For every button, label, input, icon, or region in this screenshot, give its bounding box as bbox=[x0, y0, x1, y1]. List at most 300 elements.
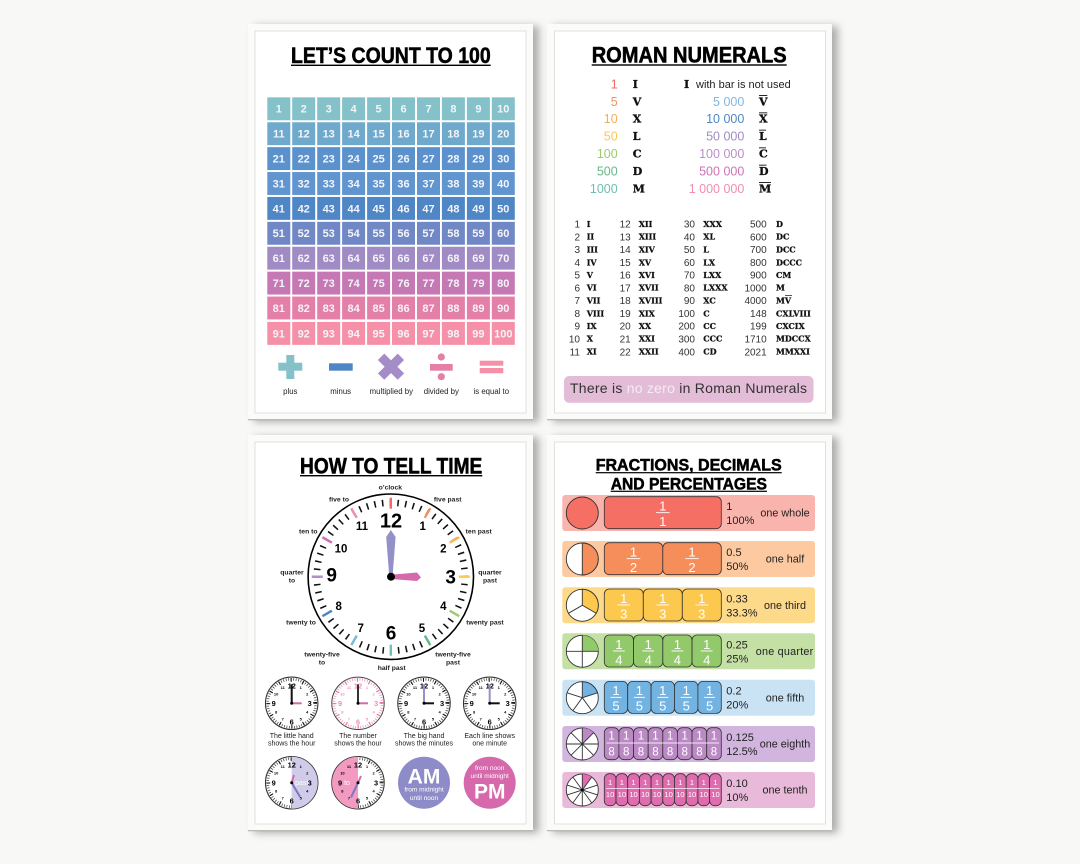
panel: roman numerals poster: V bbox=[758, 95, 768, 108]
big clock labels: quarter bbox=[478, 570, 502, 576]
table: number conversions: 20 bbox=[620, 322, 631, 333]
small clock: the number: 1 bbox=[366, 685, 369, 690]
row: one half bbox=[562, 541, 815, 577]
row: one tenth: 10 bbox=[688, 790, 696, 799]
number grid 1 to 100: 75 bbox=[372, 278, 385, 290]
operator labels: plus bbox=[283, 387, 298, 396]
number grid 1 to 100: 54 bbox=[347, 228, 361, 240]
clock numbers: 10 bbox=[335, 544, 347, 556]
clock numbers: 5 bbox=[419, 623, 426, 635]
small clock: each line: 1 bbox=[498, 685, 501, 690]
number grid 1 to 100: 90 bbox=[497, 303, 509, 315]
row: one tenth: 10 bbox=[629, 790, 638, 799]
number grid 1 to 100: 49 bbox=[472, 203, 485, 215]
small clock: the number bbox=[332, 677, 384, 730]
small clock: the little hand: 10 bbox=[274, 691, 279, 696]
AM badge: until noon bbox=[410, 795, 438, 802]
number grid 1 to 100: 89 bbox=[472, 303, 485, 315]
number grid 1 to 100: 20 bbox=[497, 129, 509, 141]
title: roman numerals: ROMAN NUMERALS bbox=[592, 43, 787, 68]
small clock: to: 7 bbox=[348, 796, 351, 801]
small clock: the big hand: 6 bbox=[422, 717, 426, 726]
table: number conversions: 148 bbox=[750, 309, 767, 320]
table: number conversions: XXX bbox=[703, 219, 723, 229]
small clock: the big hand bbox=[398, 677, 450, 730]
table: number conversions: XIII bbox=[639, 232, 656, 242]
clock captions bbox=[268, 733, 515, 748]
number grid 1 to 100: 15 bbox=[372, 129, 385, 141]
row: one half: 2 bbox=[630, 560, 637, 575]
row: one quarter: 1 bbox=[615, 637, 623, 652]
table: barred numerals: 100 000 bbox=[699, 147, 744, 161]
small clock: the number: 11 bbox=[347, 685, 352, 690]
table: number conversions: CD bbox=[703, 347, 717, 357]
table: number conversions: 100 bbox=[678, 309, 695, 320]
row: one quarter: 1 bbox=[645, 637, 652, 652]
row: one fifth: 1 bbox=[636, 683, 643, 698]
table: number conversions: 14 bbox=[620, 245, 631, 256]
small clock: the number: 8 bbox=[341, 709, 344, 714]
number grid 1 to 100: 8 bbox=[450, 104, 456, 116]
number grid 1 to 100: 92 bbox=[298, 328, 310, 340]
row: one eighth: 8 bbox=[696, 746, 703, 758]
row: one tenth: 10 bbox=[700, 790, 708, 799]
table: number conversions: LXX bbox=[703, 270, 722, 280]
small clock: past: 9 bbox=[272, 778, 276, 787]
panel: roman numerals poster: C bbox=[759, 148, 768, 161]
operator labels: minus bbox=[330, 387, 351, 396]
panel: fractions poster bbox=[547, 435, 832, 831]
row: one third bbox=[562, 587, 815, 623]
number grid 1 to 100 bbox=[267, 97, 515, 345]
row: one tenth: 10 bbox=[676, 790, 685, 799]
row: one eighth: 8 bbox=[652, 746, 659, 758]
table: number conversions: 4000 bbox=[744, 296, 767, 307]
row: one third: 1 bbox=[620, 591, 627, 606]
row: one eighth: 1 bbox=[667, 730, 673, 742]
number grid 1 to 100: 60 bbox=[497, 228, 509, 240]
number grid 1 to 100: 35 bbox=[372, 178, 385, 190]
number grid 1 to 100: 56 bbox=[397, 228, 410, 240]
number grid 1 to 100: 14 bbox=[347, 129, 361, 141]
table: number conversions: IV bbox=[587, 257, 597, 267]
row: one tenth: 1 bbox=[713, 778, 718, 787]
number grid 1 to 100: 55 bbox=[372, 228, 385, 240]
small clock: the number: 9 bbox=[338, 699, 342, 708]
table: number conversions: 50 bbox=[684, 245, 695, 256]
number grid 1 to 100: 52 bbox=[298, 228, 310, 240]
big clock labels: five to bbox=[329, 497, 349, 504]
number grid 1 to 100: 3 bbox=[326, 104, 332, 116]
number grid 1 to 100: 12 bbox=[298, 129, 310, 141]
number grid 1 to 100: 11 bbox=[273, 129, 285, 141]
small clock: each line: 11 bbox=[479, 685, 484, 690]
number grid 1 to 100: 7 bbox=[425, 104, 432, 116]
clock numbers: 6 bbox=[386, 624, 396, 645]
operator labels: divided by bbox=[424, 387, 459, 396]
clock numbers: 11 bbox=[356, 521, 369, 533]
row: one tenth: 1 bbox=[643, 778, 647, 787]
row: one quarter: one quarter bbox=[756, 646, 814, 658]
icon: divided by bbox=[430, 353, 453, 380]
row: one half: 1 bbox=[630, 544, 637, 560]
row: one eighth: 0.125 bbox=[726, 732, 754, 744]
small clock: the little hand: 6 bbox=[290, 717, 294, 726]
big clock labels bbox=[280, 485, 504, 672]
row: one quarter: 4 bbox=[615, 652, 623, 667]
panel: roman numerals poster: M bbox=[759, 182, 771, 195]
number grid 1 to 100: 68 bbox=[447, 253, 460, 265]
row: one fifth: 0.2 bbox=[726, 686, 742, 698]
row: one third: 1 bbox=[659, 591, 666, 606]
AM badge bbox=[398, 757, 450, 809]
small clock: the number: 2 bbox=[372, 691, 375, 696]
table: number conversions: 900 bbox=[750, 271, 767, 282]
row: one eighth: 1 bbox=[608, 730, 615, 742]
row: one eighth: 8 bbox=[667, 746, 673, 758]
small clock: the number: 10 bbox=[340, 691, 345, 696]
small clock: the number: 5 bbox=[366, 716, 369, 721]
number grid 1 to 100: 67 bbox=[422, 253, 435, 265]
number grid 1 to 100: 88 bbox=[447, 303, 460, 315]
row: one whole: 1 bbox=[659, 498, 666, 514]
number grid 1 to 100: 85 bbox=[372, 303, 385, 315]
small clock: past: 1 bbox=[300, 764, 303, 769]
row: one tenth: 10 bbox=[711, 790, 720, 799]
number grid 1 to 100: 37 bbox=[422, 178, 435, 190]
row: one fifth: 5 bbox=[706, 699, 713, 714]
panel: roman numerals poster: I bbox=[633, 78, 638, 91]
small clock: to: 10 bbox=[340, 771, 345, 776]
table: number conversions: 600 bbox=[750, 232, 767, 243]
clock numbers: 7 bbox=[357, 623, 364, 635]
small clock: to: 9 bbox=[338, 778, 342, 787]
table: number conversions: CXCIX bbox=[776, 321, 806, 331]
panel: roman numerals poster bbox=[547, 24, 832, 420]
row: one third: 3 bbox=[620, 606, 627, 621]
big clock labels: to bbox=[319, 660, 325, 666]
number grid 1 to 100: 41 bbox=[273, 203, 285, 215]
panel: roman numerals poster: D bbox=[633, 165, 643, 178]
number grid 1 to 100: 13 bbox=[323, 129, 335, 141]
row: one eighth: 8 bbox=[623, 746, 629, 758]
small clock: each line bbox=[464, 677, 516, 730]
row: one tenth: 1 bbox=[631, 778, 636, 787]
table: number conversions: IX bbox=[587, 321, 597, 331]
table: number conversions: XIV bbox=[639, 244, 656, 254]
table: number conversions: 12 bbox=[620, 220, 631, 231]
clock captions: The number bbox=[339, 733, 378, 740]
row: one eighth: 8 bbox=[711, 746, 717, 758]
small clock: the number: 12 bbox=[354, 681, 362, 690]
small clock: to bbox=[332, 756, 384, 809]
row: one eighth bbox=[562, 726, 815, 762]
table: basic numerals: 100 bbox=[597, 147, 618, 161]
small clock: the little hand: 3 bbox=[308, 699, 312, 708]
number grid 1 to 100: 46 bbox=[397, 203, 410, 215]
table: number conversions: 7 bbox=[574, 296, 580, 307]
small clock: the little hand bbox=[266, 677, 318, 730]
row: one eighth: 1 bbox=[711, 730, 717, 742]
small clock: the big hand: 9 bbox=[404, 699, 408, 708]
clock numbers: 1 bbox=[419, 521, 426, 533]
number grid 1 to 100: 98 bbox=[447, 328, 460, 340]
panel: roman numerals poster: C bbox=[633, 148, 642, 161]
number grid 1 to 100: 66 bbox=[397, 253, 410, 265]
icon: plus bbox=[278, 355, 302, 379]
number grid 1 to 100: 40 bbox=[497, 178, 509, 190]
small clock: the little hand: 8 bbox=[275, 709, 278, 714]
table: number conversions: 500 bbox=[750, 220, 767, 231]
table: number conversions: XVI bbox=[639, 270, 655, 280]
number grid 1 to 100: 70 bbox=[497, 253, 509, 265]
small clock: past: 2 bbox=[306, 771, 309, 776]
table: number conversions: XIX bbox=[639, 308, 656, 318]
table: number conversions: 800 bbox=[750, 258, 767, 269]
operator labels: is equal to bbox=[474, 387, 510, 396]
small clock: the little hand: 12 bbox=[288, 681, 296, 690]
big clock labels: twenty-five bbox=[304, 652, 340, 658]
panel: let's count to 100 poster bbox=[248, 24, 533, 420]
number grid 1 to 100: 21 bbox=[273, 154, 285, 166]
AM badge: from midnight bbox=[404, 786, 444, 794]
table: number conversions: 16 bbox=[620, 271, 631, 282]
clock numbers: 8 bbox=[335, 601, 342, 613]
big clock labels: past bbox=[483, 578, 498, 584]
big clock labels: ten to bbox=[299, 529, 318, 536]
big clock labels: past bbox=[446, 660, 461, 666]
table: number conversions: 1 bbox=[574, 220, 580, 231]
row: one tenth: one tenth bbox=[762, 785, 808, 797]
small clock: to: 6 bbox=[356, 797, 360, 806]
number grid 1 to 100: 74 bbox=[347, 278, 361, 290]
row: one tenth: 10 bbox=[664, 790, 673, 799]
small clock: past: 11 bbox=[281, 764, 286, 769]
number grid 1 to 100: 62 bbox=[298, 253, 310, 265]
clock numbers: 4 bbox=[440, 601, 447, 613]
row: one tenth: 0.10 bbox=[726, 778, 748, 790]
table: barred numerals: 10 000 bbox=[706, 112, 744, 126]
table: number conversions: MMXXI bbox=[776, 347, 810, 357]
PM badge bbox=[464, 757, 516, 809]
number grid 1 to 100: 18 bbox=[447, 129, 460, 141]
number grid 1 to 100: 76 bbox=[397, 278, 410, 290]
title: fractions, decimals and percentages bbox=[596, 456, 782, 493]
small clock: past: 7 bbox=[282, 796, 285, 801]
table: number conversions: M bbox=[776, 283, 785, 293]
number grid 1 to 100: 43 bbox=[323, 203, 335, 215]
operator labels bbox=[283, 387, 510, 396]
clock captions: one minute bbox=[472, 741, 507, 748]
row: one quarter: 0.25 bbox=[726, 639, 748, 651]
table: number conversions: 6 bbox=[574, 283, 580, 294]
small clock: to: 5 bbox=[366, 796, 369, 801]
number grid 1 to 100: 82 bbox=[298, 303, 310, 315]
number grid 1 to 100: 99 bbox=[472, 328, 485, 340]
small clock: the big hand: 3 bbox=[440, 699, 444, 708]
table: number conversions: VII bbox=[586, 295, 601, 305]
number grid 1 to 100: 10 bbox=[497, 104, 509, 116]
panel: roman numerals poster: V bbox=[632, 95, 642, 108]
row: one half: 50% bbox=[726, 561, 749, 573]
table: number conversions: D bbox=[776, 219, 783, 229]
number grid 1 to 100: 80 bbox=[497, 278, 509, 290]
row: one eighth: 1 bbox=[652, 730, 659, 742]
clock captions: Each line shows bbox=[464, 733, 515, 740]
table: basic numerals: 50 bbox=[604, 130, 618, 144]
number grid 1 to 100: 6 bbox=[400, 104, 407, 116]
row: one quarter: 25% bbox=[726, 653, 749, 665]
number grid 1 to 100: 22 bbox=[298, 154, 310, 166]
number grid 1 to 100: 61 bbox=[273, 253, 285, 265]
number grid 1 to 100: 28 bbox=[447, 154, 460, 166]
table: number conversions: 400 bbox=[678, 347, 695, 358]
table: number conversions: 3 bbox=[574, 245, 580, 256]
row: one whole: 1 bbox=[726, 501, 732, 513]
small clock: each line: 10 bbox=[472, 691, 477, 696]
row: one tenth: 1 bbox=[620, 778, 624, 787]
number grid 1 to 100: 38 bbox=[447, 178, 460, 190]
table: number conversions: 2 bbox=[574, 232, 580, 243]
small clock: the big hand: 5 bbox=[432, 716, 435, 721]
table: number conversions: CXLVIII bbox=[776, 308, 811, 318]
row: one fifth: 1 bbox=[612, 683, 620, 698]
small clock: past: 5 bbox=[300, 796, 303, 801]
panel: roman numerals poster: X bbox=[759, 113, 768, 126]
big clock bbox=[308, 494, 473, 659]
clock captions: shows the hour bbox=[268, 741, 316, 748]
row: one fifth: one fifth bbox=[766, 692, 804, 704]
number grid 1 to 100: 30 bbox=[497, 154, 509, 166]
number grid 1 to 100: 94 bbox=[347, 328, 361, 340]
callout: there is no zero: There is no zero in Roman Numerals bbox=[570, 380, 807, 396]
small clock: the little hand: 9 bbox=[272, 699, 276, 708]
small clock: the big hand: 7 bbox=[414, 716, 417, 721]
small clock: past: 3 bbox=[308, 778, 312, 787]
number grid 1 to 100: 47 bbox=[422, 203, 435, 215]
clock captions: shows the minutes bbox=[395, 741, 453, 748]
clock numbers: 9 bbox=[326, 566, 337, 587]
small clock: the big hand: 2 bbox=[438, 691, 441, 696]
table: number conversions: XII bbox=[639, 219, 653, 229]
number grid 1 to 100: 86 bbox=[397, 303, 410, 315]
small clock: each line: 6 bbox=[488, 717, 492, 726]
number grid 1 to 100: 19 bbox=[472, 129, 485, 141]
table: number conversions: CCC bbox=[703, 334, 722, 344]
number grid 1 to 100: 23 bbox=[323, 154, 335, 166]
table: number conversions: II bbox=[587, 232, 594, 242]
small clock: the little hand: 5 bbox=[300, 716, 303, 721]
big clock labels: twenty past bbox=[466, 620, 504, 626]
clock numbers: 12 bbox=[380, 511, 402, 533]
small clock: to: 1 bbox=[366, 764, 369, 769]
table: number conversions: XC bbox=[703, 295, 716, 305]
number grid 1 to 100: 53 bbox=[323, 228, 335, 240]
number grid 1 to 100: 63 bbox=[323, 253, 335, 265]
table: number conversions: 60 bbox=[684, 258, 695, 269]
number grid 1 to 100: 69 bbox=[472, 253, 485, 265]
number grid 1 to 100: 57 bbox=[422, 228, 435, 240]
row: one quarter: 4 bbox=[645, 652, 652, 667]
table: number conversions: XV bbox=[639, 257, 652, 267]
big clock labels: twenty-five bbox=[435, 652, 471, 658]
number grid 1 to 100: 24 bbox=[347, 154, 361, 166]
table: number conversions: X bbox=[587, 334, 594, 344]
small clock: past: past bbox=[295, 780, 308, 787]
table: number conversions: XVII bbox=[639, 283, 659, 293]
table: number conversions: 5 bbox=[574, 271, 580, 282]
row: one fifth: 5 bbox=[683, 699, 690, 714]
table: basic numerals: 1000 bbox=[590, 182, 618, 196]
small clock: the little hand: 1 bbox=[300, 685, 303, 690]
table: number conversions: DCC bbox=[776, 244, 796, 254]
note: I with bar: I bbox=[684, 78, 689, 91]
small clock: to: 2 bbox=[372, 771, 375, 776]
small clock: to: 3 bbox=[374, 778, 378, 787]
small clock: the big hand: 10 bbox=[406, 691, 411, 696]
row: one quarter: 1 bbox=[674, 637, 681, 652]
table: basic numerals: 500 bbox=[597, 164, 618, 178]
row: one eighth: 8 bbox=[681, 746, 688, 758]
number grid 1 to 100: 2 bbox=[301, 104, 307, 116]
title: how to tell time: HOW TO TELL TIME bbox=[300, 453, 482, 478]
row: one whole bbox=[562, 495, 815, 531]
table: number conversions: LXXX bbox=[703, 283, 728, 293]
table: number conversions: 21 bbox=[620, 334, 631, 345]
table: number conversions: 30 bbox=[684, 220, 695, 231]
small clock: the little hand: 7 bbox=[282, 716, 285, 721]
number grid 1 to 100: 26 bbox=[397, 154, 410, 166]
number grid 1 to 100: 36 bbox=[397, 178, 410, 190]
table: number conversions: DCCC bbox=[776, 257, 802, 267]
small clock: the big hand: 8 bbox=[407, 709, 410, 714]
big clock labels: to bbox=[289, 578, 295, 584]
small clock: the big hand: 11 bbox=[413, 685, 418, 690]
table: number conversions: XXI bbox=[639, 334, 655, 344]
number grid 1 to 100: 31 bbox=[273, 178, 285, 190]
number grid 1 to 100: 25 bbox=[372, 154, 385, 166]
small clock: the big hand: 12 bbox=[420, 681, 428, 690]
row: one half: 0.5 bbox=[726, 547, 742, 559]
callout: there is no zero bbox=[564, 376, 814, 403]
table: number conversions: XVIII bbox=[639, 295, 663, 305]
small clock: past: 12 bbox=[288, 761, 296, 770]
icon: is equal to bbox=[480, 361, 503, 373]
table: basic numerals: 1 bbox=[611, 78, 618, 92]
minute hand bbox=[386, 530, 396, 577]
table: number conversions: CC bbox=[703, 321, 716, 331]
title: let's count to 100: LET’S COUNT TO 100 bbox=[291, 43, 491, 68]
panel: roman numerals poster: L bbox=[759, 130, 767, 143]
number grid 1 to 100: 65 bbox=[372, 253, 385, 265]
number grid 1 to 100: 44 bbox=[347, 203, 361, 215]
table: number conversions: MDCCX bbox=[776, 334, 812, 344]
number grid 1 to 100: 71 bbox=[273, 278, 285, 290]
row: one tenth: 1 bbox=[667, 778, 671, 787]
small clock: the number: 7 bbox=[348, 716, 351, 721]
number grid 1 to 100: 93 bbox=[323, 328, 335, 340]
table: number conversions: 15 bbox=[620, 258, 631, 269]
small clock: each line: 5 bbox=[498, 716, 501, 721]
panel: roman numerals poster: L bbox=[633, 130, 641, 143]
row: one eighth: one eighth bbox=[760, 739, 810, 751]
row: one tenth: 1 bbox=[655, 778, 659, 787]
row: one third: one third bbox=[764, 600, 806, 612]
small clock: past: 4 bbox=[306, 789, 309, 794]
row: one eighth: 1 bbox=[696, 730, 703, 742]
clock captions: shows the hour bbox=[334, 741, 382, 748]
row: one tenth: 10% bbox=[726, 792, 749, 804]
